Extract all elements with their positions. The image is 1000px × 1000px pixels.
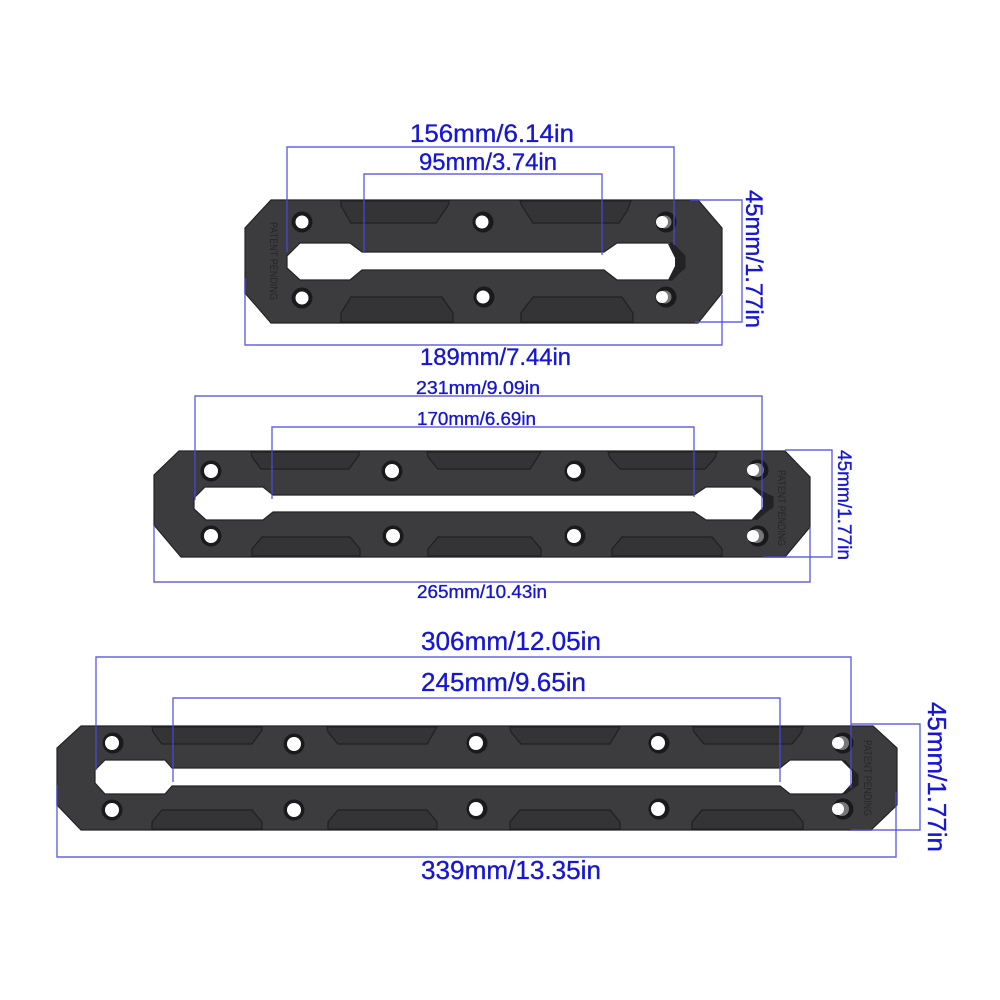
- rail 3 embossed panels: [152, 727, 803, 829]
- label: 45mm/1.77in vertical: 45mm/1.77in: [740, 190, 767, 328]
- rail 3 patent text: PATENT PENDING: [861, 740, 873, 816]
- rail 3 body: [57, 726, 897, 830]
- dimension line: 45mm height: [763, 450, 832, 557]
- rail 2 slot lip: [752, 487, 773, 520]
- rail 2 patent text: PATENT PENDING: [775, 470, 787, 546]
- dimension line: 245mm: [173, 698, 780, 782]
- dimension line: 231mm: [195, 396, 762, 510]
- dimension line: 306mm: [96, 657, 851, 788]
- label: 156mm/6.14in: 156mm/6.14in: [410, 120, 574, 148]
- rail 1: short 189mm rail: [245, 200, 722, 323]
- rail 2 mounting holes: [200, 460, 768, 546]
- rail 2: medium 265mm rail: [154, 451, 810, 557]
- label: 231mm/9.09in: 231mm/9.09in: [416, 378, 540, 398]
- label: 45mm/1.77in vertical: 45mm/1.77in: [833, 450, 854, 560]
- dimension line: 189mm: [245, 278, 722, 345]
- rail 3 dimensions: [57, 626, 952, 885]
- label: 45mm/1.77in vertical: 45mm/1.77in: [922, 702, 952, 852]
- dimension line: 45mm height: [851, 724, 920, 830]
- rail 1 body: [245, 200, 722, 323]
- dimension line: 170mm: [272, 427, 694, 499]
- label: 339mm/13.35in: 339mm/13.35in: [421, 855, 601, 885]
- rail 3 mounting holes: [102, 732, 854, 820]
- label: 265mm/10.43in: 265mm/10.43in: [417, 582, 547, 602]
- rail 2 embossed panels: [251, 452, 722, 556]
- rail 2 dimensions: [154, 378, 854, 602]
- rail 1 patent text: PATENT PENDING: [267, 222, 279, 300]
- dimension line: 339mm: [57, 785, 896, 857]
- rail 3: long 339mm rail: [57, 726, 897, 830]
- label: 245mm/9.65in: 245mm/9.65in: [421, 667, 586, 697]
- label: 189mm/7.44in: 189mm/7.44in: [420, 344, 571, 371]
- rail 3 slot lip: [842, 760, 858, 794]
- rail 1 slot lip: [668, 243, 685, 281]
- dimension line: 95mm: [364, 174, 602, 255]
- dimension line: 45mm height: [690, 200, 742, 322]
- rail 2 body: [154, 451, 810, 557]
- label: 95mm/3.74in: 95mm/3.74in: [419, 149, 557, 176]
- label: 306mm/12.05in: 306mm/12.05in: [421, 626, 601, 656]
- rail 1 embossed panels: [341, 201, 633, 322]
- rail 1 mounting holes: [292, 212, 676, 308]
- dimension line: 265mm: [154, 525, 810, 582]
- dimension line: 156mm: [287, 147, 674, 252]
- rail 1 dimensions: [245, 120, 767, 371]
- label: 170mm/6.69in: 170mm/6.69in: [417, 409, 536, 429]
